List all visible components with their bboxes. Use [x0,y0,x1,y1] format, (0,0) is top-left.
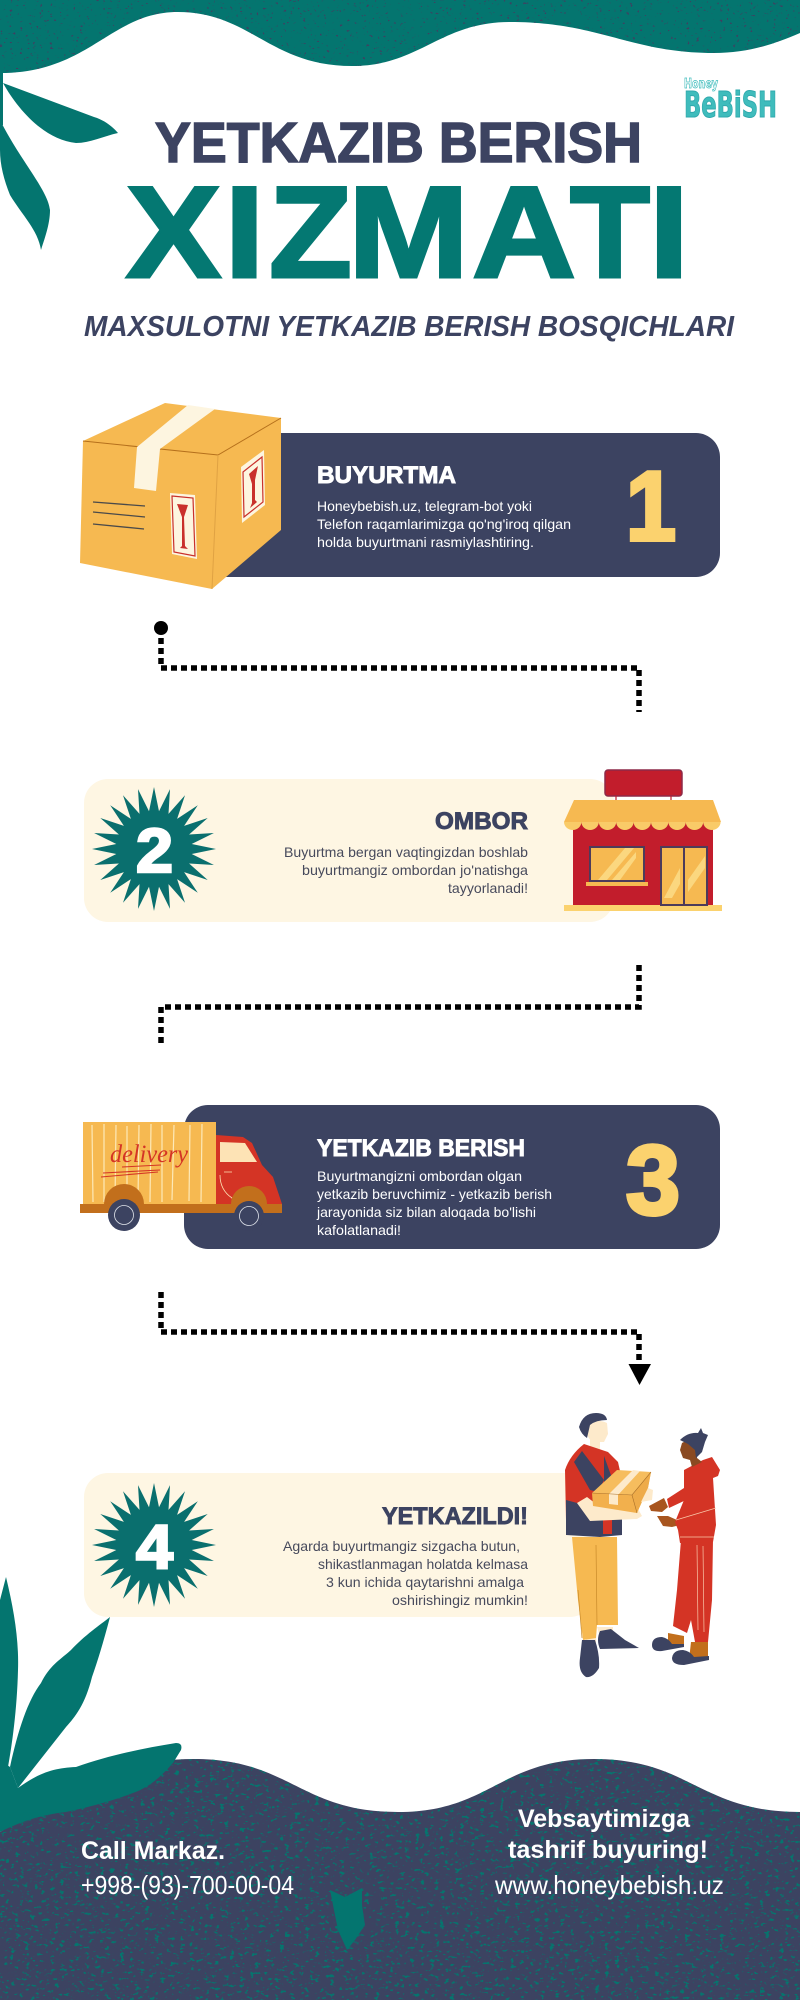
delivery lettering: delivery [110,1141,189,1168]
title line 2: M [348,159,469,305]
step 3 text: jarayonida siz bilan aloqada bo'lishi [316,1204,536,1220]
step 2 text: tayyorlanadi! [448,880,528,896]
title line 2: I [649,159,689,305]
step 2 text: Buyurtma bergan vaqtingizdan boshlab [284,844,528,860]
step 2 starburst badge [92,787,216,911]
subtitle: MAXSULOTNI YETKAZIB BERISH BOSQICHLARI [84,311,735,343]
step 2 starburst badge: 2 [136,817,173,886]
step 1 card [200,433,720,577]
step 4 starburst badge: 4 [136,1513,174,1582]
title line 2: A [472,159,576,305]
step 2 text [284,844,528,896]
step 1 text: Honeybebish.uz, telegram-bot yoki [317,498,532,514]
step 4 text [283,1538,528,1608]
icon: cardboard box [80,403,281,589]
step 1 text [317,498,571,550]
number 1: 1 [626,451,676,561]
step 1 panel [80,403,720,589]
step 4 text: shikastlanmagan holatda kelmasa [318,1556,528,1572]
website heading line 2: tashrif buyuring! [508,1836,708,1864]
step 4 heading: YETKAZILDI! [382,1503,528,1530]
connector 2 [161,965,639,1047]
contact block: phone [81,1837,294,1900]
step 4 starburst badge [92,1483,216,1607]
connector 3 with arrow [161,1292,651,1385]
parcel [592,1470,653,1513]
number 3: 3 [626,1125,680,1235]
logo: Honey [684,77,718,92]
title line 2: Z [269,159,352,305]
step 4 panel [84,1413,720,1677]
step 1 heading: BUYURTMA [317,462,456,489]
step 2 text: buyurtmangiz ombordan jo'natishga [302,862,528,878]
step 2 card [84,779,614,922]
logo [684,77,777,126]
title line 2: I [224,159,264,305]
customer [649,1428,720,1665]
step 4 text: oshirishingiz mumkin! [392,1592,528,1608]
step 2 heading: OMBOR [435,808,528,835]
step 2 panel [84,770,722,922]
bottom-left leaves [0,1577,181,1832]
title line 2: T [570,159,650,305]
footer wave [0,1750,800,2000]
step 3 text: yetkazib beruvchimiz - yetkazib berish [317,1186,552,1202]
step 3 text: kafolatlanadi! [317,1222,401,1238]
website heading line 1: Vebsaytimizga [518,1805,691,1833]
top-left leaves [0,72,118,250]
illustration: courier handing parcel to customer [565,1413,720,1677]
step 3 heading: YETKAZIB BERISH [317,1135,525,1162]
top wave [0,0,800,75]
step 4 text: Agarda buyurtmangiz sizgacha butun, [283,1538,520,1554]
title line 1: YETKAZIB BERISH [155,111,642,175]
step 3 panel [80,1105,720,1249]
courier [565,1413,642,1677]
step 4 text: 3 kun ichida qaytarishni amalga [326,1574,524,1590]
title line 2: X [126,159,221,305]
step 3 text: Buyurtmangizni ombordan olgan [317,1168,522,1184]
icon: delivery truck [80,1122,282,1231]
phone number: +998-(93)-700-00-04 [81,1870,294,1900]
connector 1 [154,621,639,712]
step 1 text: holda buyurtmani rasmiylashtiring. [317,534,534,550]
step 3 card [184,1105,720,1249]
title [126,111,689,305]
website address: www.honeybebish.uz [494,1870,724,1900]
step 4 card [84,1473,594,1617]
call centre label: Call Markaz. [81,1837,225,1865]
contact block: website [494,1805,724,1900]
step 3 text [316,1168,552,1238]
step 1 text: Telefon raqamlarimizga qo'ng'iroq qilgan [317,516,571,532]
icon: shop [564,770,722,911]
